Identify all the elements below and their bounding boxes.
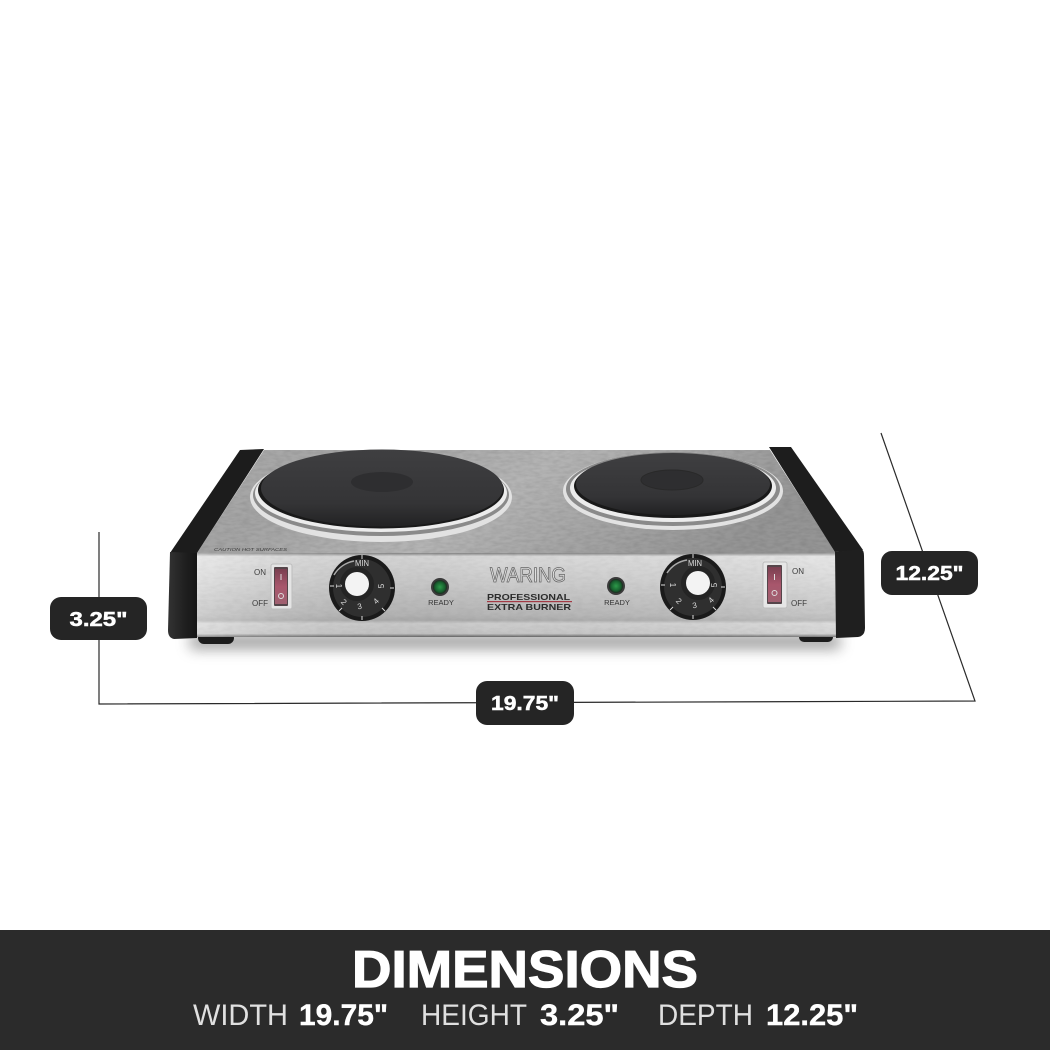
switch labels: OFF: [791, 599, 807, 608]
right burner: [563, 452, 783, 530]
switch labels: [791, 567, 807, 608]
left knob: MIN: [355, 559, 369, 568]
right ready light: READY: [604, 598, 630, 607]
right knob: 1: [668, 583, 677, 588]
right knob: MIN: [688, 559, 702, 568]
caution label: CAUTION HOT SURFACES: [214, 547, 287, 552]
left ready light: READY: [428, 598, 454, 607]
left ready light: [428, 578, 454, 607]
right knob: 2: [674, 596, 684, 606]
brand logo: EXTRA BURNER: [487, 602, 571, 612]
left switch: [252, 564, 292, 609]
footer dimensions line: WIDTH: [193, 999, 288, 1032]
top surface: [197, 450, 837, 553]
footer band: [0, 930, 1050, 1050]
footer dimensions line: 19.75": [299, 999, 388, 1032]
right knob: 4: [706, 595, 716, 605]
switch labels: ON: [254, 568, 266, 577]
left knob: 4: [371, 596, 381, 606]
footer dimensions line: 3.25": [540, 999, 619, 1032]
brand logo: [487, 564, 572, 612]
brand logo: PROFESSIONAL: [487, 592, 570, 602]
shadow under appliance: [190, 634, 840, 649]
product: double burner hot plate: [168, 447, 865, 649]
footer dimensions line: [193, 999, 858, 1032]
left knob: [329, 555, 395, 621]
left knob: 1: [334, 584, 343, 589]
infographic canvas: [0, 432, 1050, 1050]
height label pill: [50, 597, 147, 640]
feet: [198, 632, 833, 644]
right switch: [763, 562, 807, 608]
front panel: [196, 553, 836, 637]
switch labels: [252, 568, 268, 608]
width label pill: 19.75": [491, 693, 559, 715]
right knob: [660, 554, 726, 620]
footer dimensions line: DEPTH: [658, 999, 753, 1032]
footer dimensions line: HEIGHT: [421, 999, 527, 1032]
left knob: 5: [377, 583, 386, 588]
brand logo: WARING: [490, 564, 566, 587]
footer heading: DIMENSIONS: [352, 941, 698, 999]
depth label pill: 12.25": [896, 563, 964, 585]
width label pill: [476, 681, 574, 725]
left black end cap: [168, 449, 264, 639]
depth label pill: [881, 551, 978, 595]
switch labels: OFF: [252, 599, 268, 608]
left knob: 3: [357, 602, 363, 611]
right knob: 5: [710, 582, 719, 587]
right knob: 3: [692, 601, 698, 610]
dimension lines: [99, 433, 975, 704]
left burner: [250, 450, 512, 542]
left knob: 2: [339, 597, 349, 607]
height label pill: 3.25": [70, 609, 128, 631]
right black end cap: [769, 447, 865, 638]
footer dimensions line: 12.25": [766, 999, 858, 1032]
right ready light: [604, 577, 630, 607]
switch labels: ON: [792, 567, 804, 576]
